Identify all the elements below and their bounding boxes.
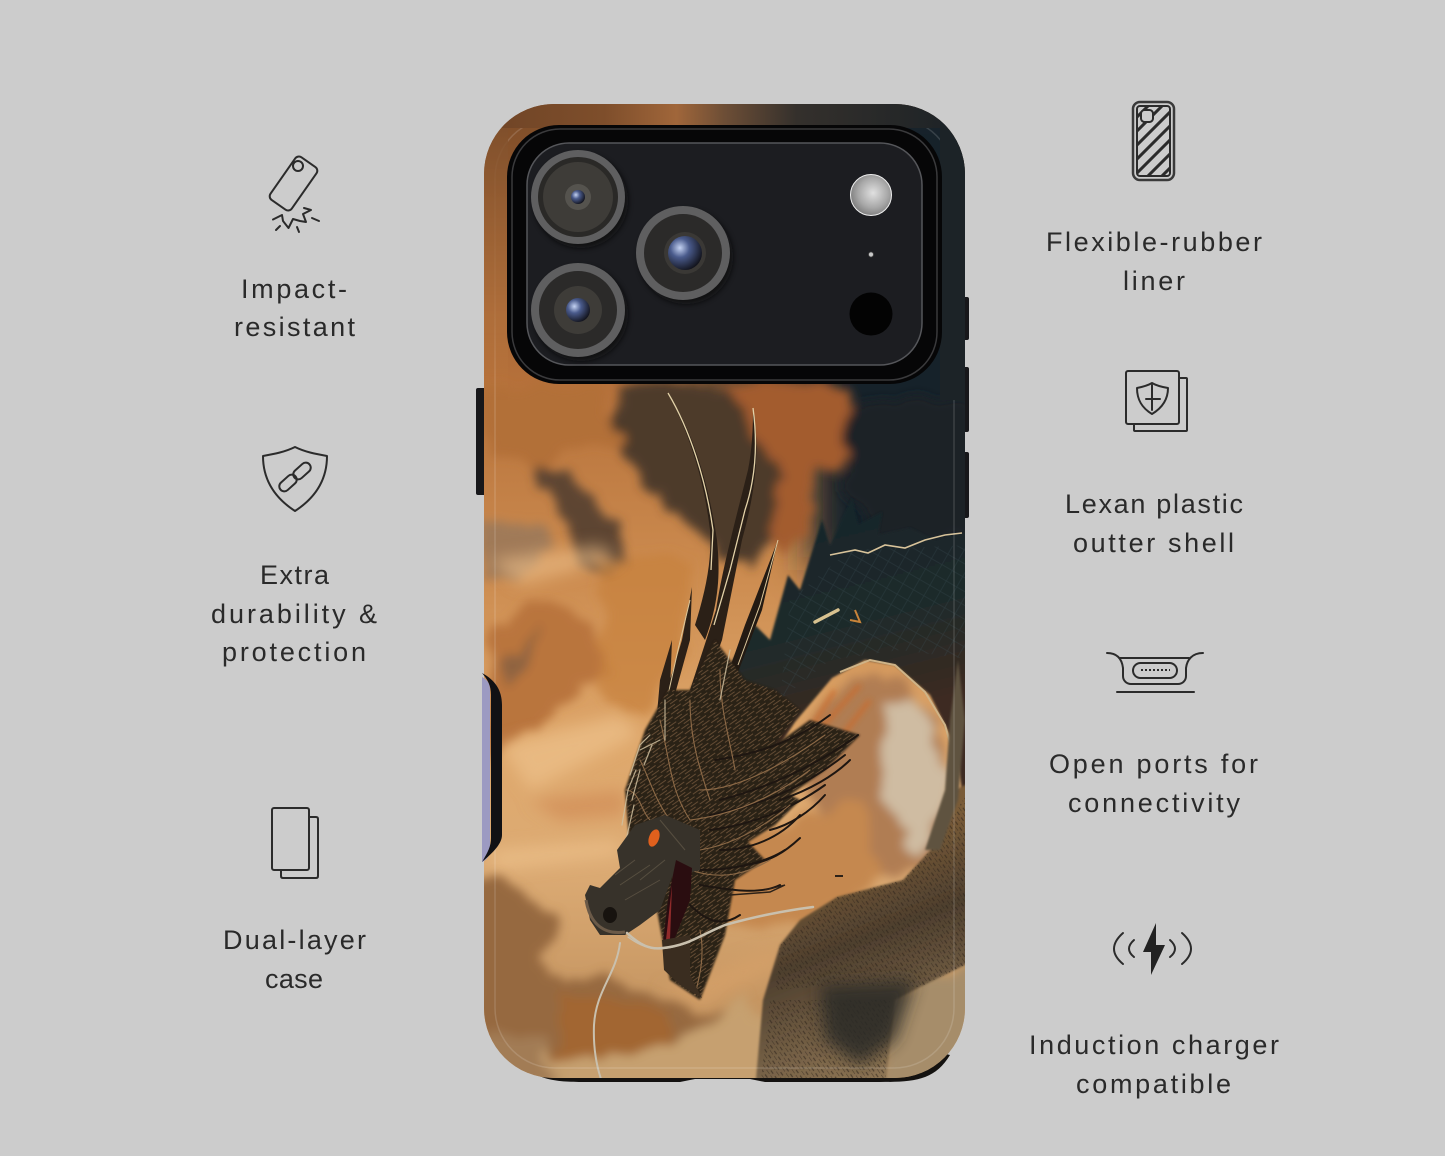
bottom shadow edge	[520, 1050, 950, 1082]
text: induction charger compatible: Induction charger	[1029, 1030, 1279, 1060]
dragon upper body	[730, 507, 965, 788]
text: open ports for connectivity: connectivity	[1068, 788, 1240, 818]
feature: dual-layer case	[223, 808, 366, 994]
icon: two stacked layers	[272, 808, 318, 878]
lens: upper left	[531, 150, 628, 248]
sensor hole	[850, 292, 892, 336]
horns	[656, 393, 778, 725]
module outer frame	[507, 125, 942, 384]
head	[585, 815, 702, 998]
text: flexible-rubber liner: Flexible-rubber	[1046, 227, 1262, 257]
whiskers	[594, 907, 813, 1082]
face wrinkles	[615, 820, 685, 900]
side buttons	[476, 297, 969, 518]
text: extra durability and protection: protection	[222, 637, 366, 667]
dragon	[585, 393, 975, 1090]
orange mane streaks	[810, 684, 872, 732]
text: impact-resistant: Impact-	[241, 274, 347, 304]
text: lexan plastic outter shell: Lexan plastic	[1065, 489, 1243, 519]
camera plate	[527, 143, 922, 365]
icon: shield with link	[263, 447, 327, 511]
lower body	[755, 780, 975, 1090]
case artwork: dragon over sunset clouds	[484, 104, 965, 1078]
icon: hatched liner	[1130, 82, 1174, 201]
glowing sky streaks	[492, 536, 734, 1000]
camera module	[507, 125, 942, 384]
icon: usb-c port	[1107, 653, 1203, 692]
dragon eye	[648, 829, 660, 847]
lens: center	[636, 206, 733, 304]
text: dual-layer case: Dual-layer	[223, 925, 366, 955]
lens: lower left	[531, 263, 628, 361]
icon: lightning with waves	[1114, 923, 1191, 975]
upper right edge	[940, 120, 965, 400]
text: lexan plastic outter shell: outter shell	[1073, 528, 1234, 558]
feature: open ports	[1049, 653, 1258, 818]
text: flexible-rubber liner: liner	[1123, 266, 1185, 296]
text: extra durability and protection: Extra	[260, 560, 330, 590]
text: impact-resistant: resistant	[234, 312, 355, 342]
icon: layered shield	[1126, 371, 1187, 431]
sky base	[484, 104, 965, 1080]
body shadow	[820, 980, 915, 1065]
storm clouds	[484, 384, 864, 763]
mane	[622, 640, 860, 1000]
feature: impact-resistant	[234, 155, 355, 342]
text: dual-layer case: case	[265, 964, 323, 994]
mouth	[663, 860, 692, 945]
lower jaw	[662, 935, 702, 998]
feature: lexan plastic outer shell	[1065, 371, 1243, 558]
feature: flexible-rubber liner	[1046, 82, 1262, 296]
lower-left cloud bank	[484, 870, 761, 1078]
feature: induction charging	[1029, 923, 1279, 1099]
dark top-right sky	[700, 90, 1000, 570]
icon: falling phone	[268, 155, 319, 232]
text: extra durability and protection: durability &	[211, 599, 377, 629]
top edge band	[484, 104, 965, 128]
glossy rim highlight	[495, 118, 954, 1068]
microphone dot	[868, 252, 874, 257]
feature: extra durability	[211, 447, 377, 667]
side cutout with purple inner liner	[482, 673, 502, 862]
lower-right clouds	[886, 965, 965, 1078]
nostril	[603, 907, 617, 923]
spine highlight	[830, 533, 962, 555]
left edge shading	[484, 121, 508, 354]
phone case	[470, 90, 1000, 1100]
text: induction charger compatible: compatible	[1076, 1069, 1231, 1099]
light cloud inside the body curve	[720, 670, 950, 930]
text: open ports for connectivity: Open ports for	[1049, 749, 1258, 779]
flash	[850, 174, 892, 216]
right strand	[925, 660, 965, 850]
mane trailing hairs	[730, 885, 785, 895]
